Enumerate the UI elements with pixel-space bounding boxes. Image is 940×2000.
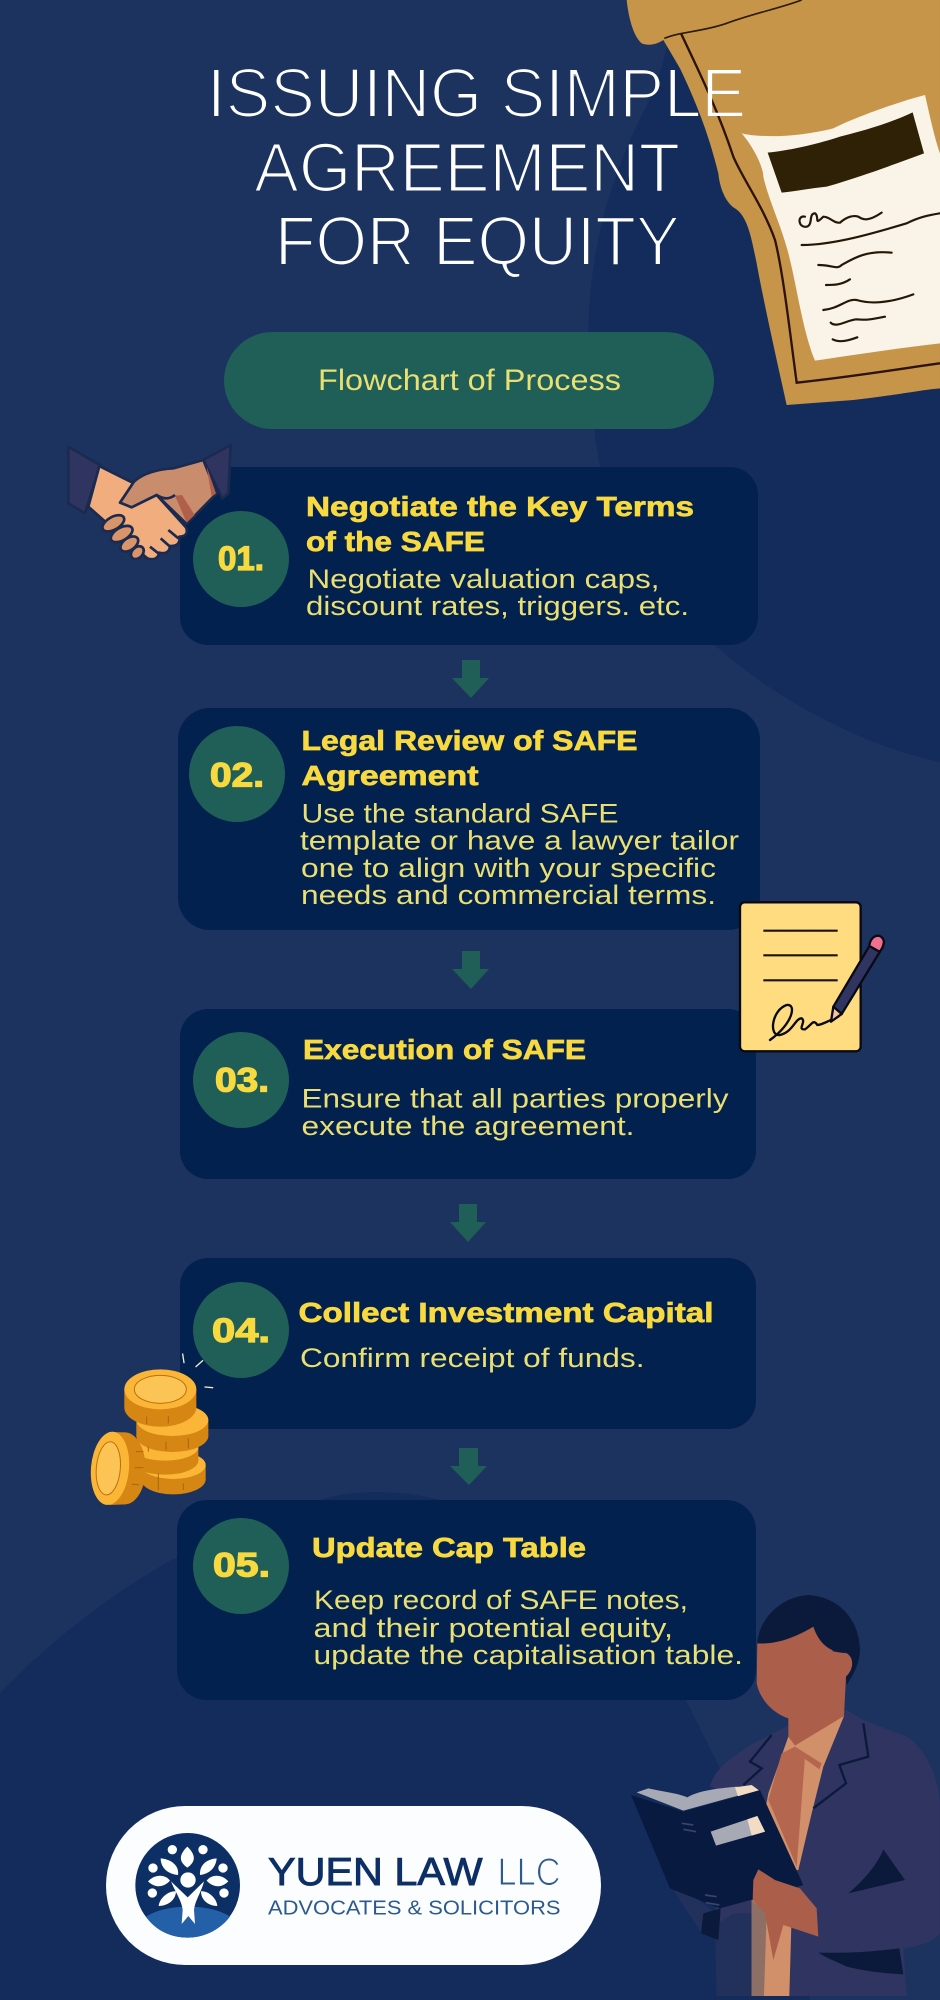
subtitle pill: Flowchart of Process	[318, 364, 621, 397]
icon: signed note with pen	[740, 902, 884, 1051]
title: AGREEMENT	[254, 128, 680, 206]
heading step 2	[302, 725, 638, 791]
logo pill	[106, 1806, 601, 1965]
title: ISSUING SIMPLE	[207, 54, 746, 132]
body step 5: Keep record of SAFE notes,	[314, 1585, 688, 1615]
number badge 03	[193, 1032, 289, 1128]
number badge 01: 01.	[218, 540, 264, 578]
heading step 2: Agreement	[302, 760, 478, 791]
panel: step 4	[180, 1258, 756, 1429]
panel: step 3	[180, 1009, 756, 1179]
heading step 5: Update Cap Table	[312, 1532, 586, 1563]
logo wordmark	[268, 1851, 560, 1920]
subtitle pill	[224, 332, 714, 429]
illustration: envelope with document	[627, 0, 940, 405]
panel: step 1	[180, 467, 758, 645]
heading step 1	[306, 491, 694, 557]
title: FOR EQUITY	[275, 202, 680, 280]
arrow 3	[450, 1204, 486, 1242]
body step 5: update the capitalisation table.	[314, 1640, 743, 1670]
body step 3: Ensure that all parties properly	[302, 1084, 729, 1114]
panel: step 2	[178, 708, 760, 930]
arrow 2	[452, 951, 489, 989]
number badge 04	[193, 1282, 289, 1378]
illustration: man reading a book	[631, 1595, 940, 1996]
body step 3	[302, 1084, 729, 1141]
logo wordmark: ADVOCATES & SOLICITORS	[268, 1898, 560, 1920]
number badge 05	[193, 1518, 289, 1614]
logo wordmark: YUEN LAW	[268, 1851, 483, 1894]
number badge 02	[189, 726, 285, 822]
body step 1: discount rates, triggers. etc.	[306, 591, 689, 621]
body step 2: template or have a lawyer tailor	[300, 826, 739, 856]
number badge 04: 04.	[212, 1312, 270, 1350]
body step 1: Negotiate valuation caps,	[308, 564, 660, 594]
body step 2: Use the standard SAFE	[302, 798, 618, 828]
logo emblem: tree	[135, 1833, 240, 1938]
icon: handshake	[68, 445, 231, 562]
arrow 4	[450, 1448, 487, 1485]
heading step 4: Collect Investment Capital	[298, 1297, 714, 1328]
number badge 01	[193, 511, 289, 607]
body step 4: Confirm receipt of funds.	[300, 1343, 644, 1373]
arrow 1	[452, 660, 489, 698]
icon: coin stack	[88, 1354, 213, 1507]
heading step 3: Execution of SAFE	[303, 1034, 586, 1065]
body step 2: one to align with your specific	[301, 853, 716, 883]
body step 1	[306, 564, 689, 621]
number badge 03: 03.	[215, 1062, 269, 1100]
body step 2	[300, 798, 739, 910]
heading step 1: Negotiate the Key Terms	[306, 491, 694, 522]
body step 2: needs and commercial terms.	[301, 880, 716, 910]
panel: step 5	[177, 1500, 756, 1700]
title	[207, 54, 746, 280]
body step 5	[314, 1585, 743, 1670]
heading step 2: Legal Review of SAFE	[302, 725, 638, 756]
number badge 02: 02.	[210, 756, 264, 794]
body step 5: and their potential equity,	[314, 1613, 673, 1643]
body step 3: execute the agreement.	[302, 1111, 634, 1141]
logo wordmark: LLC	[498, 1851, 560, 1894]
heading step 1: of the SAFE	[306, 526, 485, 557]
number badge 05: 05.	[213, 1546, 270, 1584]
